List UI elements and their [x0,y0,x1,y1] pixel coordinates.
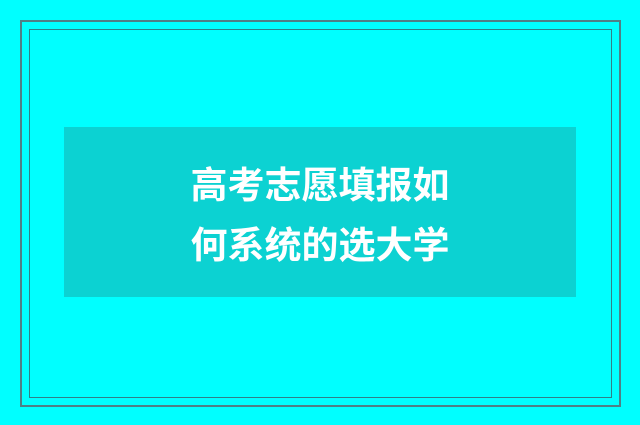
inner frame [29,29,612,398]
panel: title band [64,127,576,297]
title line 1: 高考志愿填报如 [190,165,450,206]
title line 2: 何系统的选大学 [190,225,450,266]
